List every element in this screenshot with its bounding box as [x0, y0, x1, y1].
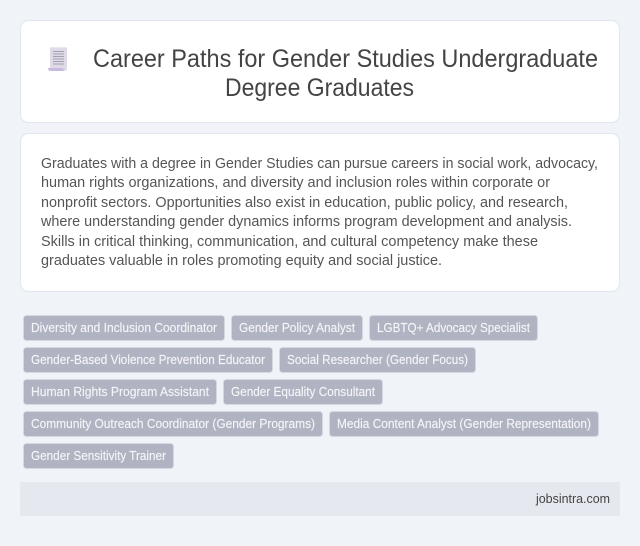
tag: Gender Equality Consultant: Gender Equality Consultant: [231, 384, 375, 399]
tag: Human Rights Program Assistant: [24, 380, 216, 404]
tag: Diversity and Inclusion Coordinator: Diversity and Inclusion Coordinator: [31, 320, 218, 335]
footer: [20, 482, 620, 516]
icon: document scroll: [48, 47, 67, 71]
title: [93, 45, 598, 102]
text block: description: [40, 156, 598, 269]
tag: Gender Policy Analyst: [232, 316, 362, 340]
text block: description: human rights organizations, and diversity and inclusion roles within corporate or: [41, 175, 550, 191]
tag: Gender-Based Violence Prevention Educator: Gender-Based Violence Prevention Educator: [31, 352, 266, 367]
tag: Gender Policy Analyst: Gender Policy Analyst: [239, 320, 355, 335]
panel: header: [20, 20, 620, 122]
tag: Media Content Analyst (Gender Representation): [330, 412, 598, 436]
title: Career Paths for Gender Studies Undergraduate: [93, 45, 598, 73]
tag: Community Outreach Coordinator (Gender Programs): Community Outreach Coordinator (Gender Programs): [31, 416, 315, 431]
text block: description: graduates valuable in roles promoting equity and social justice.: [41, 253, 442, 269]
title: Degree Graduates: [225, 74, 414, 102]
tag: LGBTQ+ Advocacy Specialist: [370, 316, 538, 340]
tag: Gender Sensitivity Trainer: Gender Sensitivity Trainer: [31, 448, 167, 463]
tag: Gender Equality Consultant: [224, 380, 382, 404]
tag: Human Rights Program Assistant: Human Rights Program Assistant: [31, 384, 209, 399]
text block: description: Skills in critical thinking, communication, and cultural competency make these: [41, 234, 538, 250]
tag: Media Content Analyst (Gender Representation): Media Content Analyst (Gender Representation): [337, 416, 591, 431]
tag: Gender Sensitivity Trainer: [24, 444, 174, 468]
footer: jobsintra.com: [535, 491, 610, 506]
tag: LGBTQ+ Advocacy Specialist: LGBTQ+ Advocacy Specialist: [377, 320, 530, 335]
text block: description: Graduates with a degree in Gender Studies can pursue careers in social work, advocacy,: [41, 156, 598, 172]
panel: career tags: [24, 316, 598, 468]
tag: Community Outreach Coordinator (Gender Programs): [24, 412, 322, 436]
panel: description: [20, 134, 620, 292]
tag: Gender-Based Violence Prevention Educator: [24, 348, 272, 372]
tag: Social Researcher (Gender Focus): [280, 348, 476, 372]
tag: Diversity and Inclusion Coordinator: [24, 316, 224, 340]
text block: description: where understanding gender dynamics informs program development and analysis.: [40, 214, 572, 230]
tag: Social Researcher (Gender Focus): Social Researcher (Gender Focus): [287, 352, 468, 367]
text block: description: nonprofit sectors. Opportunities also exist in education, public policy, and research,: [41, 195, 568, 211]
